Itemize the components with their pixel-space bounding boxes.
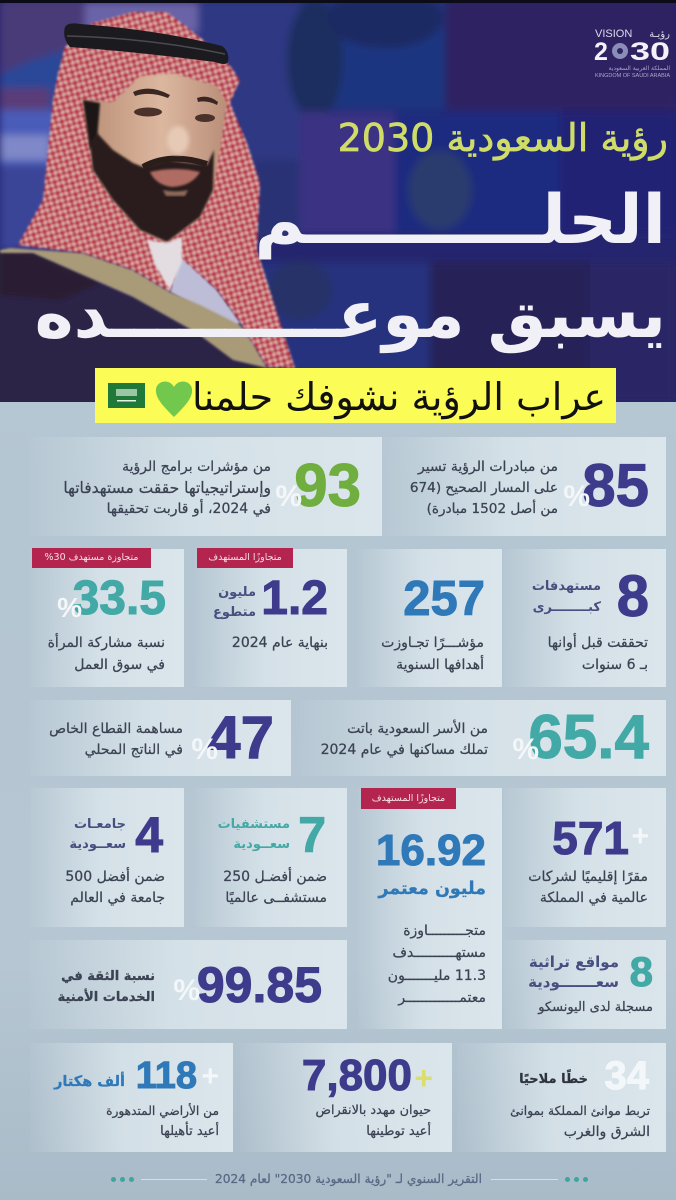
panel: 93% indicators: 93 [294,452,361,519]
panel: 118 thousand hectares: + [201,1060,219,1093]
headline line 1: الحلــــــــــم [255,181,666,260]
logo: Vision 2030: VISION [595,28,632,40]
panel: 1.2 million volunteers: متطوع [213,605,256,620]
panel: 85% initiatives on track [380,437,666,536]
logo: Vision 2030: المملكة العربية السعودية [608,65,670,72]
panel: 16.92 million pilgrims: 11.3 مليـــــــون [388,968,486,984]
panel: 93% indicators: % [275,480,302,513]
panel: 47% private sector: % [191,733,218,766]
panel: 7,800 animals: أعيد توطينها [366,1124,431,1139]
panel: 257 indicators: أهدافها السنوية [396,657,484,673]
panel: 8 major targets: بـ 6 سنوات [582,657,648,673]
panel: 571 regional headquarters: عالمية في المملكة [540,890,648,906]
panel: 1.2 million volunteers: مليون [218,585,256,600]
panel: 8 major targets [504,549,666,687]
portrait illustration [0,12,295,402]
panel: 33.5% women participation: نسبة مشاركة المرأة [48,635,165,651]
panel: 8 UNESCO heritage sites: مواقع تراثية [529,953,619,971]
panel: 65.4% home ownership: 65.4 [528,703,649,772]
panel: 16.92 million pilgrims: متجاوزًا المستهدف [372,793,445,804]
panel: 4 universities: ضمن أفضل 500 [65,869,165,885]
panel: 16.92 million pilgrims: متجـــــــــاوزة [403,923,486,939]
panel: 93% indicators: من مؤشرات برامج الرؤية [122,459,271,475]
panel: 4 universities: جامعـات [74,817,126,832]
panel: 7 hospitals: مستشفــى عالميًا [225,890,327,906]
panel: 118 thousand hectares: ألف هكتار [54,1074,125,1090]
panel: 118 thousand hectares: من الأراضي المتدهورة [106,1104,219,1118]
panel: 34 shipping lines [457,1043,666,1152]
panel: 7,800 animals: + [414,1060,433,1096]
footer text: التقرير السنوي لـ "رؤية السعودية 2030" لعام 2024 [215,1172,482,1186]
panel: 8 major targets: مستهدفات [532,579,601,594]
logo: Vision 2030 [594,28,670,79]
panel: 7 hospitals: سعــودية [233,837,290,852]
panel: 4 universities: سعــودية [69,837,126,852]
panel: 47% private sector [30,700,291,776]
panel: 65.4% home ownership: % [512,733,539,766]
panel: 118 thousand hectares: 118 [136,1055,197,1097]
logo: Vision 2030: 30 [630,38,670,66]
panel: 16.92 million pilgrims: معتمـــــــــــــر [398,990,486,1006]
panel: 1.2 million volunteers [195,549,347,687]
panel: 99.85% security trust: % [173,974,200,1007]
panel: 8 major targets: كبــــــــرى [533,600,601,615]
logo: Vision 2030: 2 [594,38,608,66]
title: Saudi Vision 2030: رؤية السعودية 2030 [338,116,668,160]
panel: 16.92 million pilgrims: مليون معتمر [378,879,486,899]
panel: 7 hospitals: 7 [298,807,326,863]
panel: 7 hospitals: مستشفيات [218,817,290,832]
icon: green heart [156,382,192,417]
panel: 65.4% home ownership: تملك مساكنها في عام 2024 [321,742,488,758]
panel: 85% initiatives on track: % [563,480,590,513]
panel: 85% initiatives on track: 85 [582,452,649,519]
panel: 65.4% home ownership: من الأسر السعودية باتت [347,721,488,737]
panel: 33.5% women participation: % [57,592,82,623]
panel: 34 shipping lines: خطًا ملاحيًا [519,1072,588,1087]
panel: 1.2 million volunteers: بنهاية عام 2024 [232,635,328,651]
panel: 8 UNESCO heritage sites: مسجلة لدى اليونسكو [538,1000,653,1015]
panel: 99.85% security trust [30,940,347,1029]
panel: 8 major targets: 8 [617,564,649,629]
yellow caption banner [95,368,616,423]
icon: Saudi flag [108,383,145,408]
panel: 571 regional headquarters: 571 [552,812,629,864]
panel: 7,800 animals: 7,800 [302,1051,412,1100]
panel: 7,800 animals [240,1043,452,1152]
panel: 8 UNESCO heritage sites: سعـــــــودية [528,973,619,991]
header banner with portrait and photo collage [0,0,676,402]
panel: 99.85% security trust: الخدمات الأمنية [58,990,155,1005]
panel: 85% initiatives on track: من مبادرات الرؤية تسير [418,459,558,475]
panel: 571 regional headquarters [504,788,666,927]
panel: 257 indicators [358,549,502,687]
panel: 571 regional headquarters: + [631,820,649,853]
panel: 257 indicators: 257 [403,572,485,626]
panel: 7 hospitals: ضمن أفضـل 250 [223,869,327,885]
panel: 34 shipping lines: الشرق والغرب [564,1124,650,1140]
panel: 99.85% security trust: نسبة الثقة في [61,969,155,984]
panel: 16.92 million pilgrims: 16.92 [376,826,486,875]
footer [111,1172,588,1186]
panel: 118 thousand hectares [30,1043,233,1152]
panel: 93% indicators [30,437,382,536]
panel: 1.2 million volunteers: متجاوزًا المستهدف [208,552,282,563]
panel: 93% indicators: وإستراتيجياتها حققت مستهدفاتها [63,479,271,497]
panel: 33.5% women participation: في سوق العمل [74,657,165,673]
panel: 33.5% women participation [30,549,184,687]
panel: 85% initiatives on track: على المسار الصحيح (674 [410,480,558,496]
panel: 33.5% women participation: 33.5 [73,572,166,625]
panel: 16.92 million pilgrims: مستهــــــــــدف [392,945,486,961]
panel: 16.92 million pilgrims [358,788,502,1029]
panel: 47% private sector: مساهمة القطاع الخاص [49,721,183,737]
panel: 33.5% women participation: متجاوزة مستهدف 30% [45,552,138,563]
logo: Vision 2030: KINGDOM OF SAUDI ARABIA [595,73,670,79]
panel: 4 universities [30,788,184,927]
caption text: عراب الرؤية نشوفك حلمنا [192,375,606,419]
panel: 7,800 animals: حيوان مهدد بالانقراض [315,1103,431,1118]
panel: 85% initiatives on track: من أصل 1502 مبادرة) [427,501,558,517]
panel: 7 hospitals [195,788,347,927]
panel: 4 universities: جامعة في العالم [70,890,165,906]
panel: 118 thousand hectares: أعيد تأهيلها [160,1124,219,1139]
headline line 2: يسبق موعــــــــــده [35,276,666,353]
panel: 8 UNESCO heritage sites [504,940,666,1029]
panel: 93% indicators: في 2024، أو قاربت تحقيقها [107,501,271,517]
panel: 4 universities: 4 [135,807,163,863]
panel: 47% private sector: في الناتج المحلي [85,742,183,758]
logo: Vision 2030: رؤيـة [649,29,670,40]
panel: 571 regional headquarters: مقرًا إقليميًا لشركات [528,869,648,885]
panel: 8 UNESCO heritage sites: 8 [630,948,653,995]
panel: 257 indicators: مؤشـــرًا تجـاوزت [381,635,484,651]
panel: 99.85% security trust: 99.85 [197,957,322,1013]
panel: 34 shipping lines: 34 [604,1054,649,1098]
panel: 1.2 million volunteers: 1.2 [261,572,328,625]
panel: 47% private sector: 47 [207,704,274,771]
panel: 65.4% home ownership [300,700,666,776]
panel: 8 major targets: تحققت قبل أوانها [548,635,648,651]
panel: 34 shipping lines: تربط موانئ المملكة بموانئ [510,1104,650,1118]
